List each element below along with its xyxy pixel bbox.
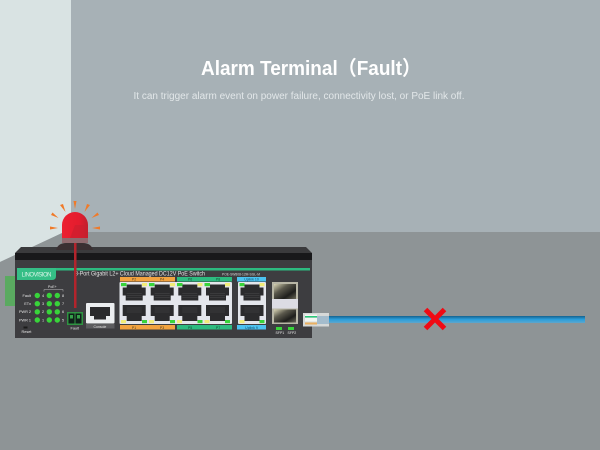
beacon rays: [50, 201, 100, 230]
model number: POE-SW808-12M-SGL-M: [222, 272, 260, 276]
port labels: P7: [216, 326, 220, 330]
reset button: [22, 326, 32, 334]
status LEDs: 6: [62, 310, 64, 314]
DIN mounting clip: [5, 276, 15, 306]
status LEDs: PWR 2: [19, 310, 31, 314]
port labels: P4: [160, 278, 164, 282]
status LEDs: 7: [62, 302, 64, 306]
uplink ports: Uplink 9: [245, 326, 258, 330]
beacon base: [56, 243, 93, 250]
port labels: P6: [188, 278, 192, 282]
brand label: [17, 268, 56, 280]
RJ45 ports: [120, 282, 232, 324]
switch body: [15, 247, 312, 338]
port labels: P8: [216, 278, 220, 282]
status LEDs: PWR 1: [19, 318, 31, 322]
status LEDs: PoE+: [48, 285, 57, 289]
port labels: P2: [132, 278, 136, 282]
status LEDs: Fault: [23, 294, 32, 298]
title: Alarm Terminal（Fault）: [201, 57, 421, 80]
model heading: 8-Port Gigabit L2+ Cloud Managed DC12V PoE Switch: [75, 272, 205, 278]
port labels: P1: [132, 326, 136, 330]
alarm wire: [74, 243, 76, 308]
SFP ports: SFP2: [288, 331, 296, 335]
RJ45 plug: [303, 313, 329, 326]
status LEDs: 1: [42, 318, 44, 322]
brand label: LINOVISION: [22, 272, 52, 278]
fault alarm terminal: Fault: [70, 326, 80, 330]
SFP ports: SFP1: [276, 331, 284, 335]
status LEDs: 4: [42, 294, 44, 298]
alarm beacon: [50, 201, 100, 250]
network cable: [329, 316, 585, 323]
subtitle: It can trigger alarm event on power failure, connectivity lost, or PoE link off.: [134, 91, 464, 102]
uplink ports: [237, 277, 266, 330]
uplink ports: Uplink 10: [244, 278, 259, 282]
beacon dome: [62, 212, 88, 243]
status LEDs: ETx: [24, 302, 31, 306]
red cross: link lost: [426, 310, 444, 328]
status LEDs: 8: [62, 294, 64, 298]
port labels: [120, 277, 232, 330]
SFP ports: [272, 282, 298, 335]
reset button: Reset: [22, 330, 32, 334]
switch device: [5, 247, 312, 338]
PoE port group: [120, 277, 232, 330]
status LEDs: [19, 285, 64, 323]
port labels: P3: [160, 326, 164, 330]
status LEDs: 2: [42, 310, 44, 314]
console port: Console: [94, 325, 106, 329]
status LEDs: 3: [42, 302, 44, 306]
port labels: P5: [188, 326, 192, 330]
console port: [86, 303, 114, 329]
fault alarm terminal: [67, 312, 83, 330]
status LEDs: 5: [62, 318, 64, 322]
